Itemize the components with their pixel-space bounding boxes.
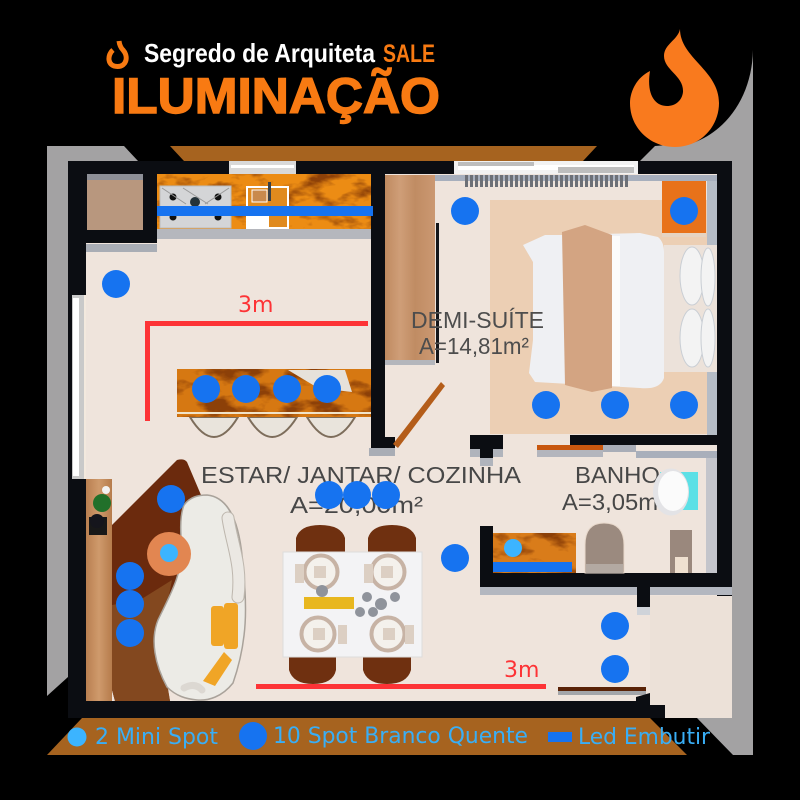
- logo: brand line: [109, 38, 435, 68]
- legend band: [47, 718, 687, 755]
- outer walls: [68, 161, 732, 718]
- kitchen counter: [157, 174, 371, 239]
- room label: bedroom: DEMI-SUÍTE: [411, 307, 544, 333]
- led strips: [157, 206, 572, 572]
- icon: small flame: [109, 41, 126, 66]
- warm white spots: [102, 197, 698, 683]
- round side table: [147, 532, 191, 576]
- legend: warm white spot: 10 Spot Branco Quente: [273, 724, 528, 749]
- title: ILUMINAÇÃO: [112, 68, 440, 124]
- top kitchen window: [229, 161, 296, 174]
- vanity: [493, 533, 576, 573]
- floor: [86, 174, 717, 701]
- room label: bath: BANHO: [575, 462, 660, 488]
- wood console: [86, 479, 112, 701]
- mini spots: [160, 539, 522, 562]
- brand tag: SALE: [383, 40, 435, 68]
- grey frame: left: [47, 146, 138, 696]
- stove: [160, 186, 231, 228]
- wall: living to bedroom: [371, 174, 395, 448]
- icon: large flame: [630, 29, 719, 147]
- wall base strip: [369, 448, 395, 456]
- bedroom wall strip: [435, 175, 717, 181]
- dimension line: top: [148, 293, 368, 421]
- bathroom lower wall: [480, 526, 732, 615]
- orange cushions: [203, 603, 238, 686]
- dimension line: bottom: [256, 658, 546, 689]
- plant decor: [89, 486, 111, 535]
- napkins: [295, 564, 414, 644]
- pillow niche: [664, 245, 717, 372]
- sink: [247, 182, 288, 229]
- toilet: [585, 523, 624, 573]
- pillows: [680, 247, 715, 367]
- bidet: [670, 530, 692, 573]
- balcony floor: [650, 596, 732, 718]
- sofa: [154, 495, 246, 700]
- bar counter: [177, 369, 371, 437]
- room label: living: A=20,00m²: [290, 492, 423, 518]
- dining set: [283, 525, 422, 684]
- legend: [68, 722, 711, 750]
- wardrobe: [385, 175, 439, 365]
- bedroom rug: [490, 200, 707, 434]
- balcony door: [558, 687, 650, 702]
- brand name: Segredo de Arquiteta: [144, 38, 375, 68]
- floor plan: [68, 161, 732, 718]
- storage closet: [86, 174, 157, 252]
- chairs: [289, 525, 416, 684]
- bedroom window: [454, 161, 638, 174]
- bedroom door: [393, 382, 445, 448]
- bath right shade: [706, 458, 717, 573]
- nightstand: [662, 181, 706, 237]
- plates: [302, 556, 404, 650]
- legend: led: Led Embutir: [578, 725, 711, 750]
- bedroom and bath wall: [470, 435, 717, 466]
- legend: mini spot: 2 Mini Spot: [95, 725, 218, 750]
- dimension label: 3m: [504, 658, 539, 683]
- teal mirror square: [660, 472, 698, 510]
- room label: bedroom: [411, 307, 544, 359]
- room label: living: [201, 462, 522, 518]
- room label: bath: A=3,05m²: [562, 489, 666, 515]
- right wall shade: [707, 181, 717, 435]
- left window: [72, 295, 86, 479]
- table runner: [304, 597, 354, 609]
- room label: bath: [562, 462, 666, 515]
- room label: bedroom: A=14,81m²: [419, 333, 529, 359]
- room label: living: ESTAR/ JANTAR/ COZINHA: [201, 462, 522, 488]
- rug: brown wood: [112, 459, 201, 701]
- ceiling lamp: [653, 468, 689, 516]
- closet rail: [465, 175, 630, 187]
- dimension label: 3m: [238, 293, 273, 318]
- grey frame: right with curve: [640, 50, 753, 755]
- brown top band: [170, 146, 597, 161]
- bed: [523, 225, 715, 392]
- centerpiece balls: [316, 585, 400, 617]
